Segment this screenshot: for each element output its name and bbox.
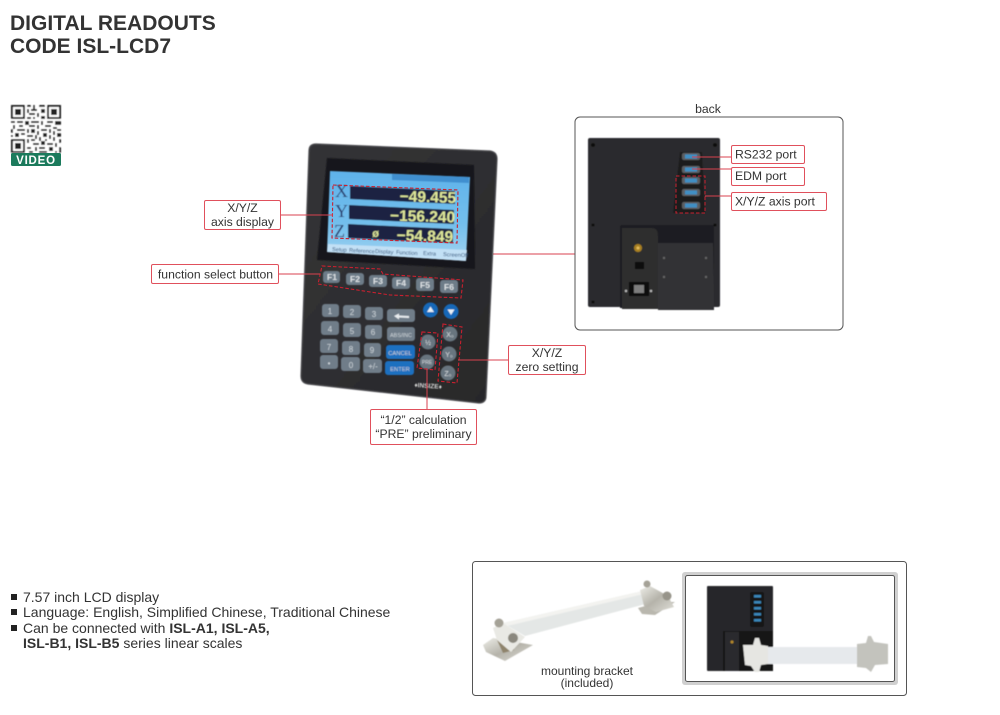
feature list (11, 589, 391, 651)
brand logo: ♦INSIZE♦ (414, 382, 443, 391)
function keys: F3 (373, 276, 383, 286)
callout: X/Y/Z zero setting: X/Y/Z (532, 346, 563, 360)
title: CODE ISL-LCD7 (10, 35, 171, 58)
callout: 1/2 calculation and PRE preliminary (370, 369, 476, 444)
softkey labels (332, 247, 469, 259)
keypad: 0 (349, 361, 354, 370)
DB9 ports (682, 153, 700, 209)
softkey labels: ScreenOff (443, 252, 469, 259)
device body (301, 144, 497, 403)
callout: 1/2 calculation and PRE preliminary: “PRE” preliminary (375, 427, 472, 441)
callout: function select button (152, 264, 320, 284)
feature list: Can be connected with ISL-A1, ISL-A5, (23, 620, 270, 636)
keypad: ABS/INC (390, 333, 412, 339)
bracket caption: mounting bracket (541, 664, 634, 678)
title: DIGITAL READOUTS (10, 12, 216, 35)
bracket photo (483, 580, 675, 661)
callout: X/Y/Z axis display: X/Y/Z (227, 201, 258, 215)
function keys: F4 (396, 278, 406, 288)
keypad: 4 (328, 325, 333, 334)
axis letters: Z (334, 221, 345, 241)
readout values: ø (372, 228, 379, 240)
red dashed highlights (318, 185, 463, 383)
back label: back (695, 102, 722, 116)
RS232 callout: RS232 port (735, 148, 797, 162)
device back photo (588, 138, 720, 310)
keypad: 6 (371, 328, 376, 337)
readout values: −54.849 (396, 227, 454, 246)
callout: X/Y/Z zero setting: zero setting (515, 360, 579, 374)
function keys: F2 (350, 274, 360, 284)
X/Y/Z axis port callout: X/Y/Z axis port (735, 194, 816, 208)
readout values (372, 188, 457, 246)
bracket caption (541, 664, 634, 690)
X/Y/Z axis port callout (705, 192, 826, 210)
callout: function select button: function select button (158, 268, 273, 282)
keypad: 2 (350, 308, 355, 317)
softkey labels: Extra (423, 251, 437, 258)
bracket caption: (included) (561, 676, 613, 690)
EDM callout (692, 168, 804, 186)
keypad (320, 302, 458, 391)
readout values: −156.240 (390, 208, 455, 226)
feature list: 7.57 inch LCD display (23, 589, 159, 605)
QR code with video badge (11, 105, 61, 167)
keypad: ½ (425, 339, 431, 347)
softkey labels: Display (375, 249, 394, 256)
softkey labels: Setup (332, 247, 347, 254)
function keys: F6 (444, 282, 454, 292)
keypad: CANCEL (388, 351, 413, 357)
screen bezel (317, 158, 475, 269)
axis letters (334, 181, 348, 241)
panel: back view (575, 117, 843, 330)
arrow buttons (423, 302, 438, 318)
panel: mounting bracket (472, 562, 906, 696)
feature list: Language: English, Simplified Chinese, Traditional Chinese (23, 604, 391, 620)
title (10, 12, 216, 58)
device front photo (301, 144, 497, 403)
callout: X/Y/Z axis display: axis display (211, 215, 275, 229)
keypad: Y₀ (445, 352, 453, 359)
connector line: front to back (493, 253, 575, 255)
LCD screen (327, 171, 470, 261)
callout: 1/2 calculation and PRE preliminary: “1/2” calculation (380, 413, 467, 427)
keypad: ENTER (390, 367, 410, 373)
bullet markers (11, 594, 17, 631)
callout: X/Y/Z zero setting (458, 346, 586, 374)
axis letters: X (335, 181, 348, 201)
keypad: PRE (422, 360, 433, 366)
keypad: 3 (372, 310, 377, 319)
function keys: F1 (327, 272, 337, 282)
keypad: 5 (350, 327, 355, 336)
function keys (323, 271, 458, 293)
keypad: • (328, 359, 331, 368)
keypad: 9 (370, 346, 375, 355)
QR pattern (11, 105, 61, 154)
dashed port highlight (676, 176, 705, 213)
RS232 callout (692, 146, 804, 164)
keypad: 7 (327, 343, 332, 352)
readout values: −49.455 (399, 188, 457, 207)
keypad: 8 (349, 345, 354, 354)
softkey labels: Reference (349, 248, 375, 255)
axis letters: Y (335, 201, 348, 221)
keypad: X₀ (446, 332, 454, 339)
VIDEO badge: VIDEO (16, 155, 56, 167)
keypad: 1 (328, 307, 333, 316)
inset photo frame (682, 572, 898, 685)
softkey labels: Function (396, 250, 418, 257)
keypad: Z₀ (444, 371, 452, 378)
readout bars (348, 186, 455, 243)
callout: X/Y/Z axis display (204, 200, 333, 230)
feature list: ISL-B1, ISL-B5 series linear scales (23, 635, 242, 651)
inset device with bracket (707, 586, 888, 672)
round function keys (420, 326, 458, 380)
EDM callout: EDM port (735, 169, 787, 183)
function keys: F5 (420, 280, 430, 290)
keypad: +/- (368, 362, 378, 371)
